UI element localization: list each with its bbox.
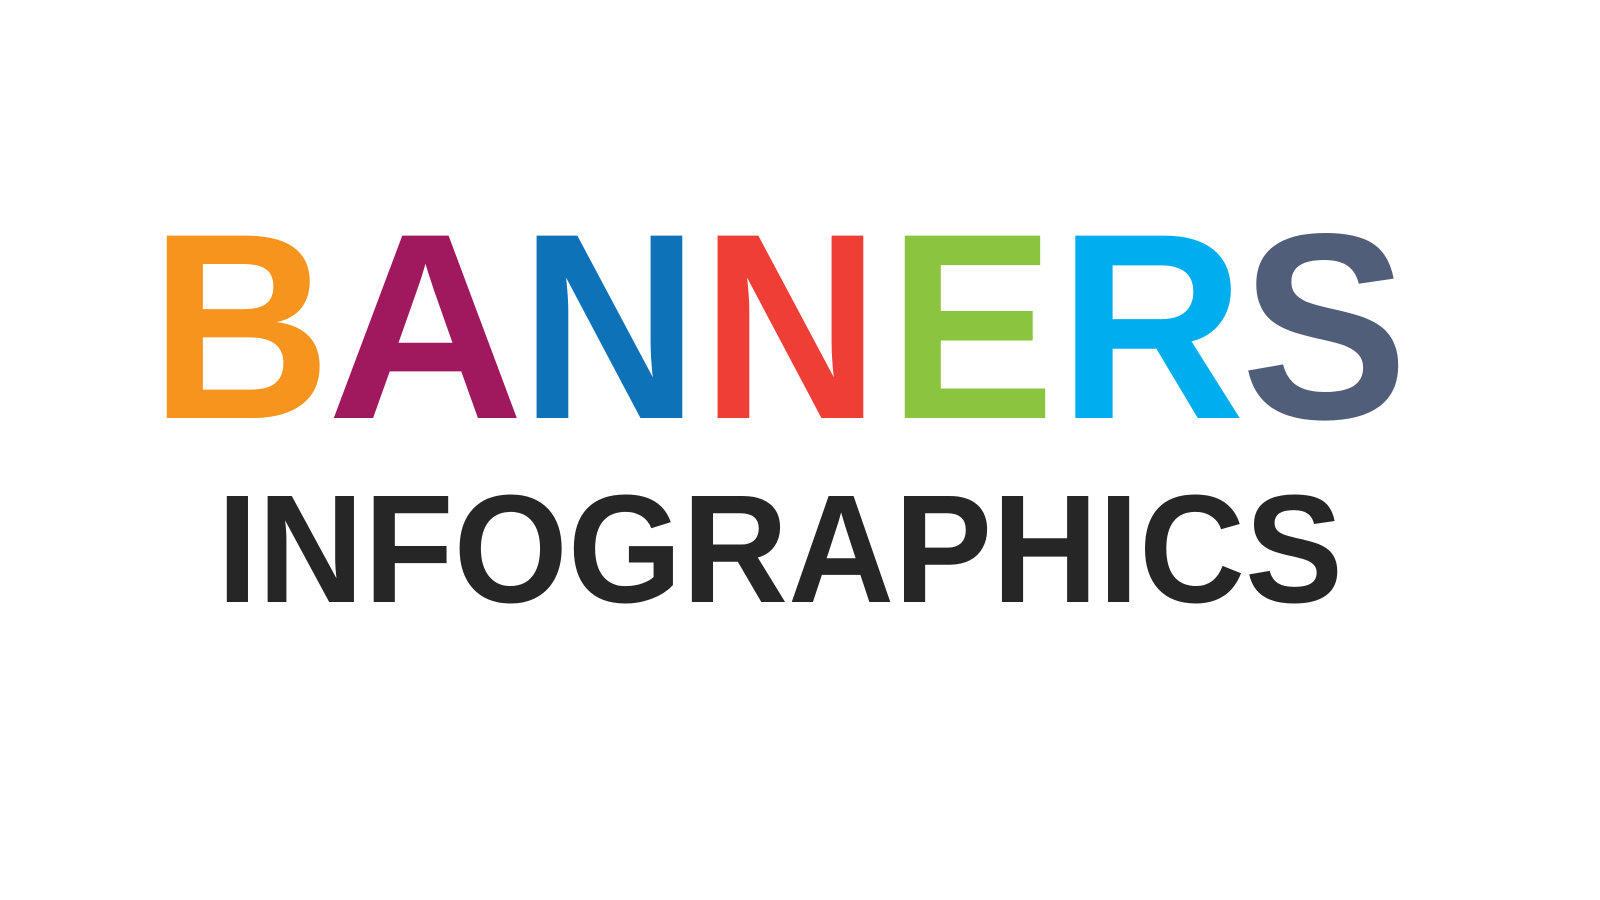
subtitle: INFOGRAPHICS: INFOGRAPHICS: [217, 463, 1343, 635]
letter S: S: [1241, 179, 1408, 475]
letter A: A: [327, 179, 524, 475]
letter E: E: [888, 179, 1055, 475]
letter B: B: [150, 179, 331, 475]
letter R: R: [1058, 179, 1245, 475]
title: BANNERS: [150, 179, 1408, 475]
letter N: N: [520, 179, 699, 475]
letter N: N: [701, 179, 880, 475]
